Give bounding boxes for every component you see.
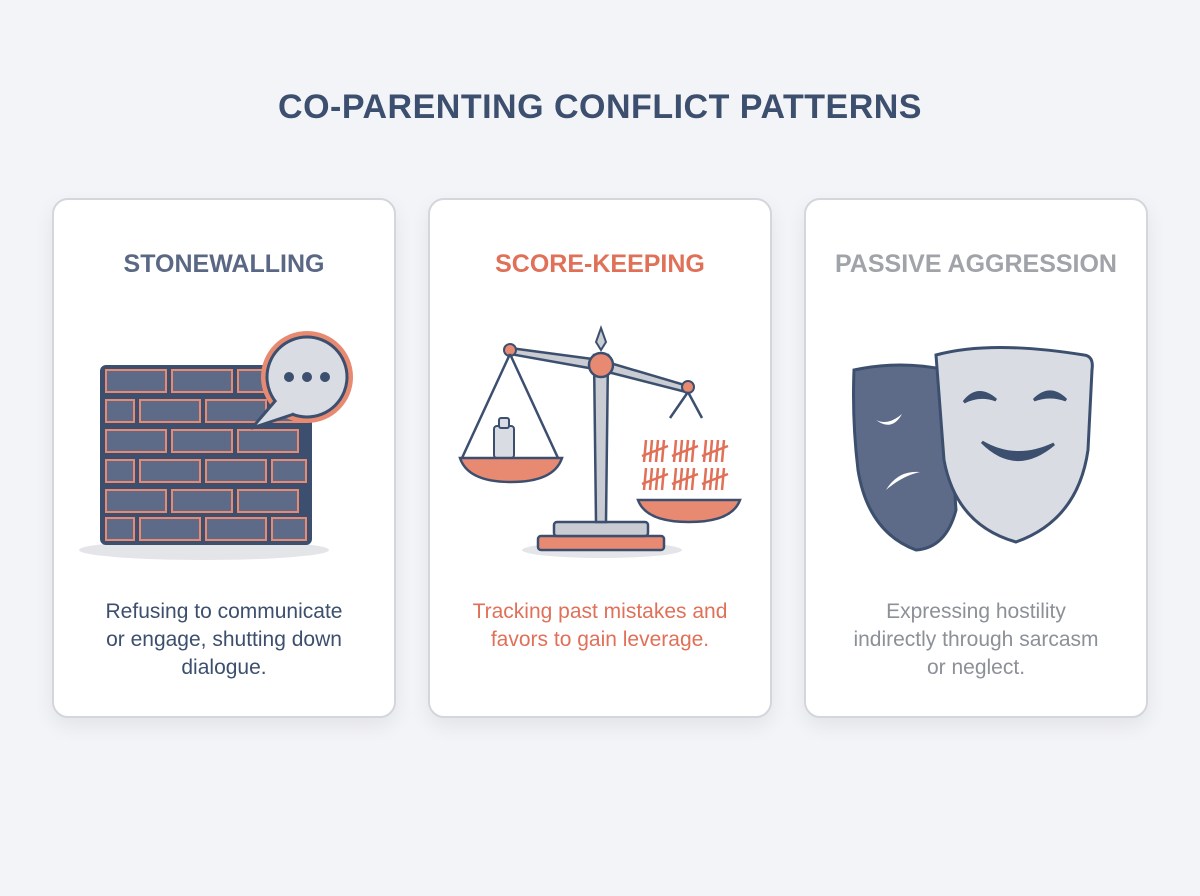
title: CO-PARENTING CONFLICT PATTERNS [278,88,922,126]
icon: brick wall with speech bubble [79,331,353,560]
text: stonewalling description: or engage, shutting down [106,628,342,651]
text: passive aggression description: indirectly through sarcasm [853,628,1099,651]
panel: stonewalling [52,198,396,718]
text: stonewalling description: dialogue. [181,656,267,679]
text: stonewalling description: Refusing to communicate [106,600,342,623]
text: passive aggression description: or neglect. [927,656,1025,679]
panel: score-keeping [428,198,772,718]
text: score-keeping description: Tracking past mistakes and [473,600,727,623]
heading: passive aggression: PASSIVE AGGRESSION [835,250,1117,278]
text: score-keeping description [473,600,727,651]
text: stonewalling description [106,600,342,679]
icon: balance scale with tally marks [458,325,742,558]
panel: passive aggression [804,198,1148,718]
text: passive aggression description [853,600,1099,679]
text: score-keeping description: favors to gain leverage. [491,628,709,651]
icon: theater masks [852,346,1094,552]
heading: score-keeping: SCORE-KEEPING [495,250,705,278]
heading: stonewalling: STONEWALLING [124,250,324,278]
text: passive aggression description: Expressing hostility [886,600,1066,623]
